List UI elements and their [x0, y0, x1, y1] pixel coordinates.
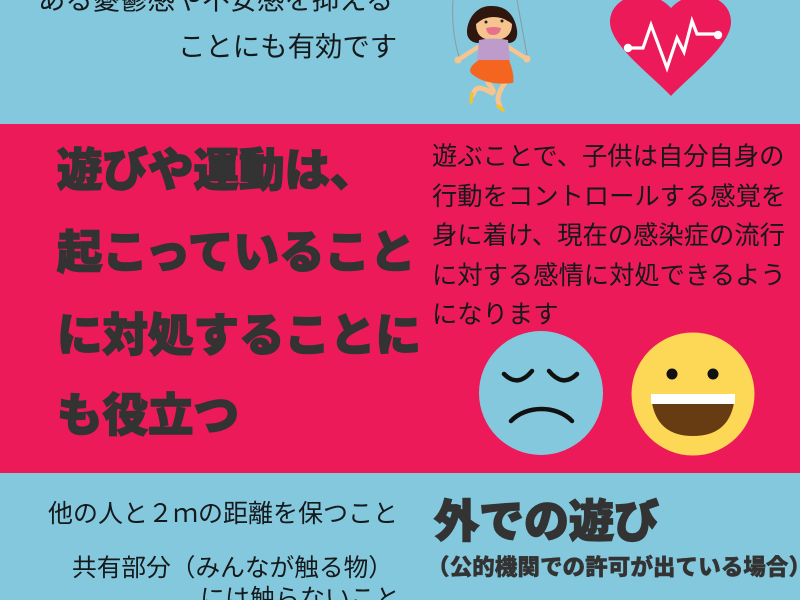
text: permission note: （公的機関での許可が出ている場合） [427, 555, 800, 580]
heading: play and exercise help coping [56, 145, 421, 441]
heading: outdoor play: 外での遊び [434, 496, 659, 547]
icon: heart with heartbeat line [610, 0, 731, 96]
panel: top blue section [0, 0, 800, 124]
text: explanation: 身に着け、現在の感染症の流行 [432, 222, 785, 250]
text: outdoor play rules [48, 500, 400, 600]
text: explanation: 遊ぶことで、子供は自分自身の [432, 143, 784, 171]
text: explanation [432, 143, 786, 329]
icon: happy face [632, 332, 754, 456]
text: explanation: に対する感情に対処できるよう [432, 262, 786, 290]
heading: play and exercise help coping: に対処することに [57, 310, 421, 361]
text: anxiety relief [38, 0, 397, 62]
panel: pink section [0, 124, 800, 473]
heading: play and exercise help coping: も役立つ [57, 390, 239, 441]
heading: play and exercise help coping: 遊びや運動は、 [57, 145, 376, 196]
heading: play and exercise help coping: 起こっていること [57, 227, 416, 278]
text: outdoor play rules: 他の人と２ｍの距離を保つこと [48, 500, 398, 528]
text: explanation: 行動をコントロールする感覚を [432, 183, 786, 211]
icon: girl on swing [452, 0, 530, 112]
panel: bottom blue section [0, 473, 800, 600]
text: anxiety relief: ことにも有効です [178, 31, 397, 62]
text: outdoor play rules: 共有部分（みんなが触る物） [72, 555, 393, 582]
icon: sad face [479, 331, 603, 455]
text: explanation: になります [432, 301, 558, 329]
